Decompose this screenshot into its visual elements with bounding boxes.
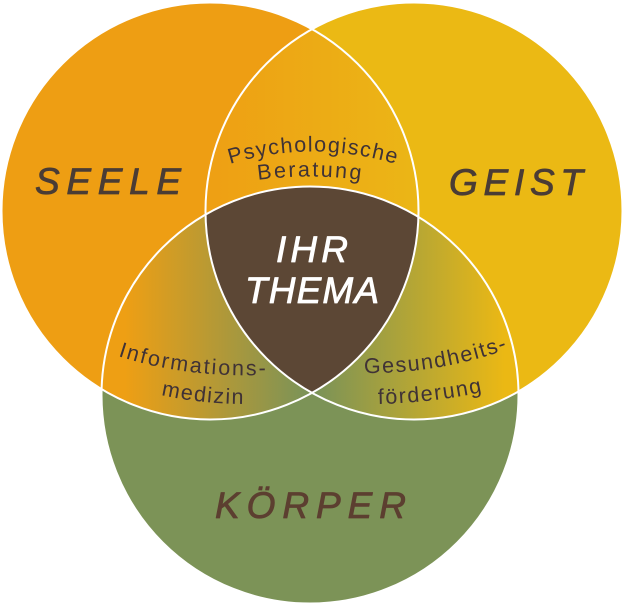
circle: Körper <box>102 186 518 604</box>
label: Psychologische Beratung: Psychologische <box>228 136 396 164</box>
centre label: Ihr Thema <box>245 229 379 311</box>
circle: Seele <box>2 2 418 420</box>
label: Seele: SEELE <box>35 161 182 202</box>
label: Geist: GEIST <box>449 162 585 203</box>
label: Psychologische Beratung: Beratung <box>258 162 361 184</box>
overlap: Seele and Körper <box>102 216 292 418</box>
label: Informationsmedizin: medizin <box>162 384 242 404</box>
label: Gesundheitsförderung: förderung <box>378 381 481 404</box>
overlap: Seele and Geist <box>206 30 372 213</box>
label: Psychologische Beratung <box>228 136 396 184</box>
centre label: Ihr Thema: IHR <box>276 229 348 270</box>
label: Gesundheitsförderung <box>365 342 505 404</box>
label: Informationsmedizin <box>120 342 265 404</box>
label: Gesundheitsförderung: Gesundheits- <box>365 342 505 374</box>
overlap: centre <box>206 188 418 392</box>
centre label: Ihr Thema: THEMA <box>245 270 379 311</box>
label: Körper: KÖRPER <box>215 485 406 526</box>
label: Informationsmedizin: Informations- <box>120 342 265 376</box>
overlap: Geist and Körper <box>332 218 518 418</box>
circle: Geist <box>206 2 622 420</box>
